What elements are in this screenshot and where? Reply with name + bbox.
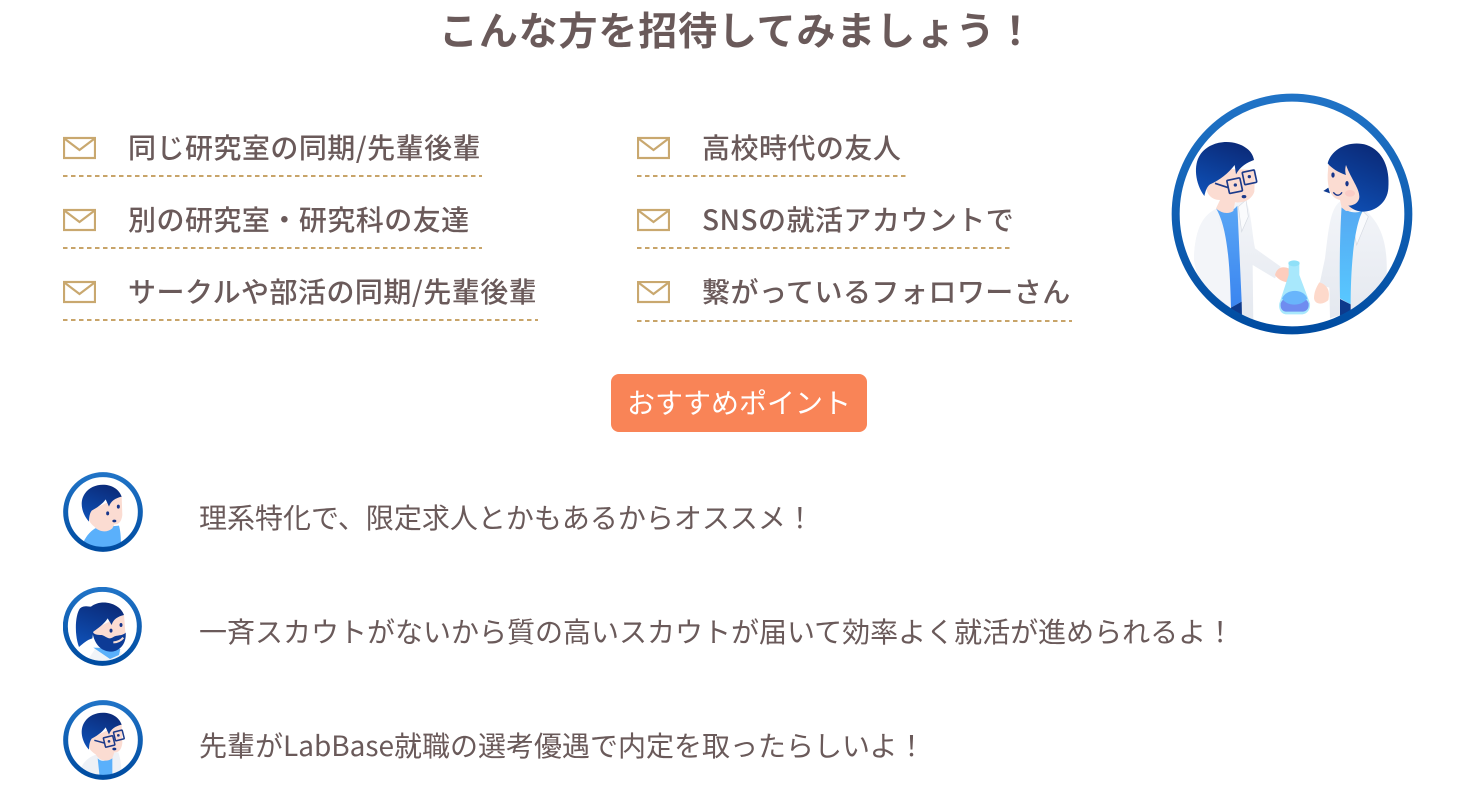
avatar: man with glasses: [63, 700, 143, 780]
list item: followers: [637, 271, 1072, 322]
left researcher: [1194, 142, 1289, 320]
list item: other lab: 別の研究室・研究科の友達: [128, 199, 470, 239]
avatar: young man: [63, 472, 143, 552]
right researcher: [1314, 144, 1389, 318]
list item: circle: [63, 270, 538, 321]
text: recommendation 1: 理系特化で、限定求人とかもあるからオススメ！: [199, 497, 814, 537]
list item: same lab: [63, 126, 482, 177]
list item: followers: 繋がっているフォロワーさん: [702, 271, 1071, 311]
list item: SNS: [637, 198, 1012, 249]
list item: high school: 高校時代の友人: [702, 127, 901, 167]
button: recommended points: おすすめポイント: [627, 382, 851, 422]
avatar: bearded person with ponytail: [63, 587, 142, 666]
title: こんな方を招待してみましょう！: [439, 1, 1036, 57]
list item: circle: サークルや部活の同期/先輩後輩: [128, 271, 537, 311]
text: recommendation 3: 先輩がLabBase就職の選考優遇で内定を取ったらしいよ！: [199, 725, 926, 765]
list item: same lab: 同じ研究室の同期/先輩後輩: [128, 127, 481, 167]
illustration: two researchers with flask: [1172, 94, 1412, 334]
list item: SNS: SNSの就活アカウントで: [702, 199, 1014, 239]
list item: high school: [637, 126, 907, 177]
button: recommended points: [611, 374, 867, 432]
text: recommendation 2: 一斉スカウトがないから質の高いスカウトが届いて効率よく就活が進められるよ！: [199, 611, 1234, 651]
list item: other lab: [63, 198, 482, 249]
flask: [1279, 260, 1310, 314]
